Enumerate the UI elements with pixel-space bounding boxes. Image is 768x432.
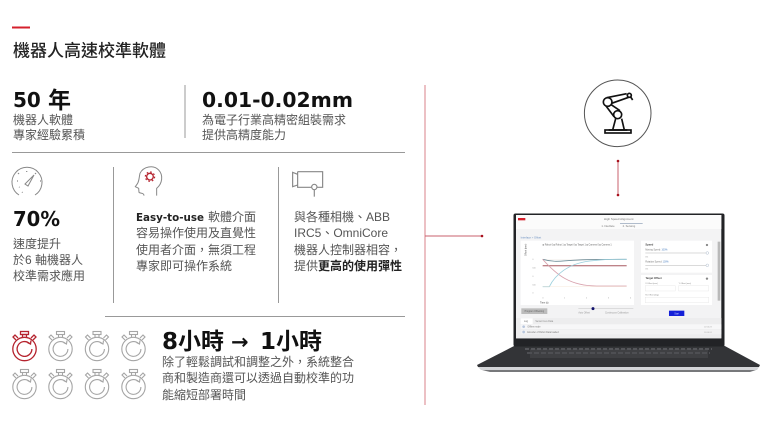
tabs: [601, 223, 643, 228]
title: 機器人高速校準軟體: [13, 42, 166, 60]
text: compatibility: IRC5、OmniCore: [294, 226, 388, 240]
stat description: 50 years: 專家經驗累積: [13, 127, 85, 142]
panel: speed settings: 1%: [645, 256, 648, 258]
log area: 10:56:23: [704, 327, 713, 329]
slider: Continuous Calibration: [605, 312, 629, 315]
accent bar: [12, 26, 30, 28]
software screen: [516, 215, 721, 338]
panel: speed settings: Speed: [645, 243, 654, 247]
button: start: Start: [674, 312, 679, 315]
chart panel: 100: [532, 284, 537, 286]
heading: 8 hours to 1 hour: 1小時: [260, 329, 322, 355]
stat description: 50 years: 機器人軟體: [13, 113, 73, 127]
chart panel: 0: [532, 276, 534, 278]
log area: [516, 318, 721, 338]
text: compatibility: 提供更高的使用彈性: [294, 259, 402, 273]
panel: speed settings: [641, 241, 712, 273]
icon: head with gear: [135, 167, 162, 196]
chart lines: [543, 259, 627, 287]
chart panel: 100: [532, 267, 537, 269]
connector: robot to laptop: [617, 160, 619, 196]
stat value: 50 年: 50: [13, 88, 41, 112]
chart panel: 4: [630, 297, 632, 299]
text: compatibility: 機器人控制器相容，: [294, 242, 402, 257]
heading: 8 hours to 1 hour: →: [231, 330, 249, 354]
chart panel: 3: [608, 297, 610, 299]
icon: gray stopwatches: [13, 332, 145, 399]
slider: [578, 307, 633, 315]
chart panel: Time (s): [540, 302, 549, 304]
slider: Auto Offset: [578, 312, 590, 315]
panel: target offset: [641, 275, 712, 305]
panel: speed: [12, 167, 85, 283]
log area: Encoder of Robot Data loaded: [527, 331, 559, 334]
panel: easy to use: [135, 167, 256, 273]
stat value: precision: 0.01-0.02mm: [202, 88, 353, 112]
chart panel: 0: [532, 293, 534, 295]
button: start: [669, 311, 684, 316]
stat value: 50 年: 年: [48, 88, 71, 114]
button: program: [521, 308, 547, 314]
panel: speed settings: Rotation Speed: 100%: [645, 260, 669, 263]
text: deployment time: 能縮短部署時間: [162, 387, 246, 402]
text: speed: 速度提升: [13, 237, 61, 251]
chart panel: [521, 241, 634, 305]
stat description: precision: 為電子行業高精密組裝需求: [202, 113, 346, 127]
chart legend: ■ Robot 0 ■ Robot 1 ■ Target 0 ■ Target 1 ■ Camera 0 ■ Camera 1: [543, 243, 612, 246]
text: deployment time: 除了輕鬆調試和調整之外，系統整合: [162, 355, 354, 369]
stopwatch icons: [13, 332, 145, 399]
laptop lid: [514, 214, 724, 346]
chart panel: 0: [542, 297, 544, 299]
stat: 50 years: [13, 88, 85, 142]
tabs: 2. Sensing: [623, 224, 636, 228]
panel: target offset: X Offset (mm): [645, 282, 658, 285]
breadcrumb: Interface > Offset: [521, 236, 541, 240]
scrollbar: [718, 242, 720, 301]
panel: target offset: Rz Offset (deg): [645, 294, 659, 297]
text: easy to use: Easy-to-use: [136, 211, 204, 224]
tabs: 1. Interface: [601, 224, 615, 228]
divider: [184, 85, 186, 138]
log area: 10:56:24: [704, 332, 713, 334]
panel: target offset: Y Offset (mm): [679, 282, 691, 285]
chart panel: 0: [532, 259, 534, 261]
icon: robot arm: [584, 80, 651, 147]
panel: speed settings: Moving Speed: 100%: [645, 249, 667, 251]
text: easy to use: 容易操作使用及直覺性: [136, 225, 256, 240]
panel: speed settings: 1%: [645, 268, 648, 270]
icon: speed gauge: [12, 167, 42, 195]
window title: High Speed Alignment: [604, 217, 634, 221]
chart axis labels: Offset (mm): [525, 244, 528, 256]
icon: red stopwatch: [13, 332, 36, 361]
chart panel: 1: [564, 297, 565, 299]
connector: main red line with branch: [425, 85, 483, 405]
text: easy to use: 軟體介面: [208, 209, 256, 224]
text: deployment time: 商和製造商還可以透過自動校準的功: [162, 370, 354, 385]
stat description: precision: 提供高精度能力: [202, 127, 286, 142]
icon: camera: [293, 172, 323, 197]
text: speed: 校準需求應用: [13, 268, 85, 283]
laptop: [477, 214, 760, 372]
panel: target offset: Target Offset: [645, 276, 662, 280]
panel: compatibility: [293, 172, 402, 273]
stat: precision: [202, 88, 353, 142]
log area: Sensor Live Data: [535, 320, 554, 323]
text: easy to use: 使用者介面，無須工程: [136, 242, 256, 257]
text: speed: 於6 軸機器人: [13, 252, 83, 267]
text: compatibility: 與各種相機、ABB: [294, 210, 390, 224]
button: program: Program Offsetting: [525, 310, 545, 313]
ABB logo: [518, 218, 525, 220]
log area: Log: [524, 321, 529, 323]
laptop base: [477, 345, 760, 372]
text: easy to use: 專家即可操作系統: [136, 258, 232, 273]
heading: 8 hours to 1 hour: 8小時: [162, 329, 224, 355]
chart panel: 2: [586, 297, 587, 299]
stat value: 70%: 70%: [13, 207, 60, 231]
log area: Offline mode: [527, 327, 541, 329]
